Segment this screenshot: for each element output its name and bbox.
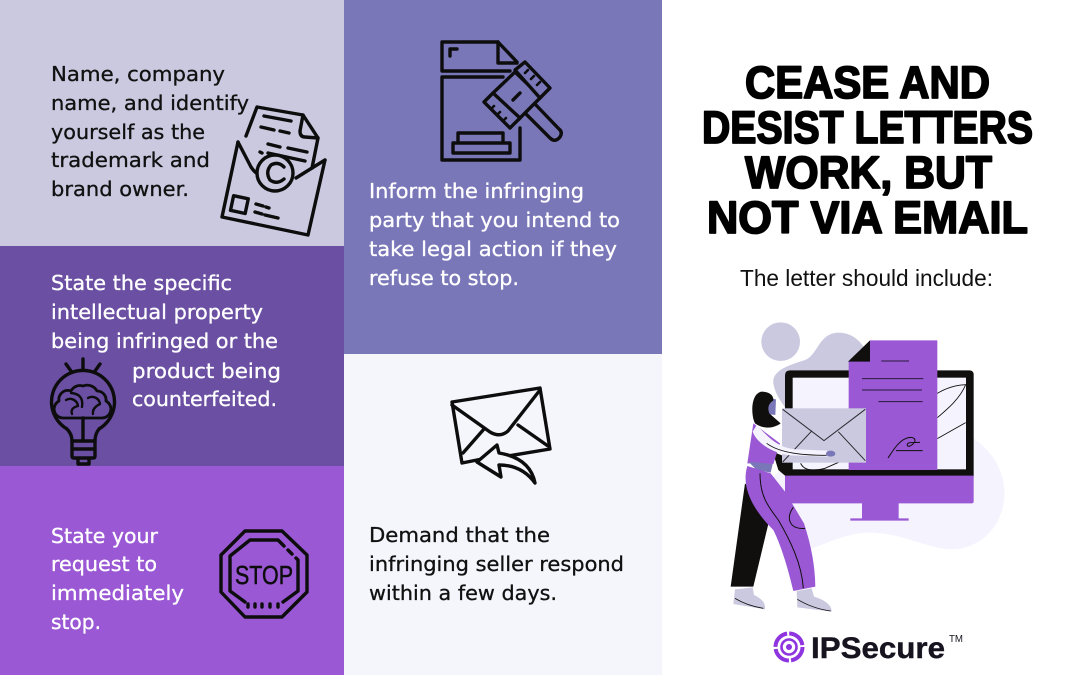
text: specific intellectual property	[51, 271, 281, 411]
text: immediately stop: stop.	[51, 610, 101, 634]
panel: demand response	[344, 354, 662, 675]
panel: name and identify	[0, 0, 344, 246]
woman: back leg	[731, 483, 772, 587]
panel: legal action	[344, 0, 662, 354]
woman: arm	[753, 425, 835, 457]
logo mark	[776, 634, 802, 660]
illustration: woman with letter and monitor	[731, 322, 1004, 612]
woman: front leg	[746, 466, 815, 591]
icon: stop sign	[221, 531, 307, 617]
text: immediately stop: request to	[51, 552, 157, 576]
text: inform infringing party: take legal action if they	[369, 237, 617, 261]
text: name and owner: trademark and	[51, 148, 210, 172]
text: demand seller respond: Demand that the	[369, 523, 550, 547]
text: name and owner: yourself as the	[51, 120, 205, 144]
woman: torso	[747, 423, 785, 476]
lavender circle and blob	[761, 322, 867, 410]
text: inform infringing party: refuse to stop.	[369, 266, 519, 290]
text: inform infringing party	[369, 179, 620, 290]
text: specific intellectual property: product being	[132, 359, 281, 383]
monitor	[785, 370, 974, 521]
woman: shoes	[733, 587, 832, 612]
woman: hair and face	[752, 392, 781, 428]
text: name and owner: brand owner.	[51, 177, 189, 201]
text: specific intellectual property: intellectual property	[51, 300, 263, 324]
envelope held	[782, 408, 866, 463]
icon: document and gavel	[442, 42, 561, 160]
text: name and owner: name, and identify	[51, 91, 249, 115]
text: demand seller respond: infringing seller respond	[369, 552, 624, 576]
document	[848, 340, 937, 470]
text: name and owner	[51, 62, 249, 201]
icon: brain light bulb	[52, 359, 115, 464]
panel: request to stop	[0, 466, 344, 675]
logo: IPSecure	[776, 632, 963, 665]
title: DESIST LETTERS	[702, 102, 1033, 153]
text: name and owner: Name, company	[51, 62, 225, 86]
text: immediately stop: immediately	[51, 581, 184, 605]
trademark: TM	[949, 634, 963, 645]
text: immediately stop: State your	[51, 524, 159, 548]
icon: copyright envelope	[222, 107, 325, 235]
title: NOT VIA EMAIL	[707, 192, 1028, 243]
text: inform infringing party: party that you intend to	[369, 208, 620, 232]
panel: state intellectual property	[0, 246, 344, 466]
text: demand seller respond: within a few days.	[369, 581, 557, 605]
title: CEASE AND	[745, 57, 990, 108]
pale blob	[773, 437, 1004, 549]
text: inform infringing party: Inform the infringing	[369, 179, 584, 203]
icon: reply envelope	[452, 388, 550, 483]
title	[702, 57, 1033, 243]
logo wordmark: IPSecure	[811, 632, 945, 665]
text: demand seller respond	[369, 523, 624, 605]
title: WORK, BUT	[745, 147, 992, 198]
icon: stop sign: STOP	[235, 560, 293, 590]
text: specific intellectual property: State the specific	[51, 271, 232, 295]
text: specific intellectual property: counterfeited.	[132, 387, 277, 411]
subtitle: The letter should include:	[740, 265, 993, 291]
text: immediately stop	[51, 524, 184, 634]
text: specific intellectual property: being infringed or the	[51, 329, 278, 353]
